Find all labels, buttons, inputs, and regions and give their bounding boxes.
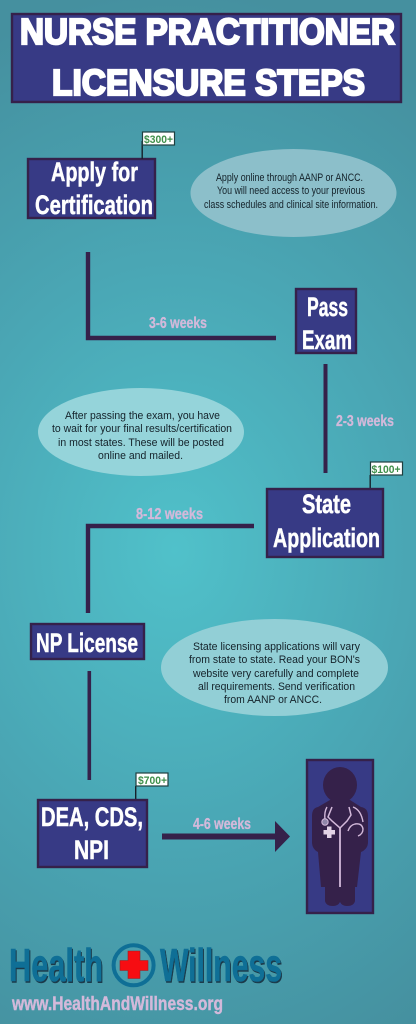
step: Apply for Certification: Apply for [51, 157, 138, 187]
duration: 4-6 weeks: 4-6 weeks [193, 816, 251, 833]
logo: Health Willness: Willness [160, 939, 282, 991]
step: NP License [31, 624, 144, 659]
callout: apply online: Apply online through AANP or ANCC. [216, 172, 363, 184]
callout: after passing [38, 388, 244, 476]
step: State Application [267, 489, 383, 557]
step: Apply for Certification [28, 157, 155, 220]
callout: state licensing: from state to state. Read your BON's [189, 654, 360, 666]
step: State Application: Application [273, 523, 380, 553]
title: LICENSURE STEPS [52, 62, 365, 103]
price flag: $700+: $700+ [138, 775, 167, 787]
connector: license to DEA [88, 671, 91, 780]
step: DEA, CDS, NPI: DEA, CDS, [41, 802, 143, 832]
callout: state licensing: from AANP or ANCC. [224, 694, 322, 706]
callout: state licensing [161, 619, 388, 716]
duration: 3-6 weeks: 3-6 weeks [149, 315, 207, 332]
callout: apply online [190, 149, 396, 237]
step: DEA, CDS, NPI [38, 800, 147, 867]
callout: after passing: in most states. These will be posted [58, 437, 224, 449]
step: NP License: NP License [36, 628, 138, 658]
title [12, 11, 401, 103]
duration: 2-3 weeks: 2-3 weeks [336, 413, 394, 430]
callout: state licensing: all requirements. Send verification [198, 681, 355, 693]
callout: state licensing: State licensing applications will vary [193, 641, 360, 653]
step: Pass Exam: Pass [307, 292, 348, 322]
title: NURSE PRACTITIONER [20, 11, 395, 52]
arrow: to nurse practitioner [162, 821, 290, 852]
step: Apply for Certification: Certification [35, 190, 153, 220]
logo: Health Willness [9, 939, 283, 992]
callout: after passing: online and mailed. [98, 450, 183, 462]
duration: 8-12 weeks: 8-12 weeks [136, 506, 203, 523]
callout: apply online: You will need access to your previous [217, 185, 365, 197]
price flag: $100+ [370, 462, 402, 489]
price flag: $100+: $100+ [372, 464, 400, 476]
logo: Health Willness: Health [10, 940, 104, 992]
callout: after passing: After passing the exam, you have [65, 410, 220, 422]
price flag: $300+: $300+ [144, 134, 173, 146]
logo: Health Willness: Willness [161, 940, 283, 992]
callout: state licensing: website very carefully and complete [192, 668, 359, 680]
price flag: $700+ [135, 773, 168, 800]
step: Pass Exam [296, 289, 356, 355]
connector: state application to license [88, 526, 254, 613]
website url: www.HealthAndWillness.org [11, 994, 223, 1015]
logo: Health Willness: Health [9, 939, 103, 991]
step: State Application: State [302, 489, 351, 519]
connector: certification to exam [88, 252, 276, 338]
icon: nurse practitioner figure [307, 760, 373, 913]
step: Pass Exam: Exam [302, 325, 352, 355]
callout: after passing: to wait for your final results/certification [52, 423, 232, 435]
connector: exam to state application [324, 364, 328, 473]
callout: apply online: class schedules and clinical site information. [204, 199, 378, 211]
price flag: $300+ [142, 132, 174, 159]
step: DEA, CDS, NPI: NPI [74, 835, 109, 865]
